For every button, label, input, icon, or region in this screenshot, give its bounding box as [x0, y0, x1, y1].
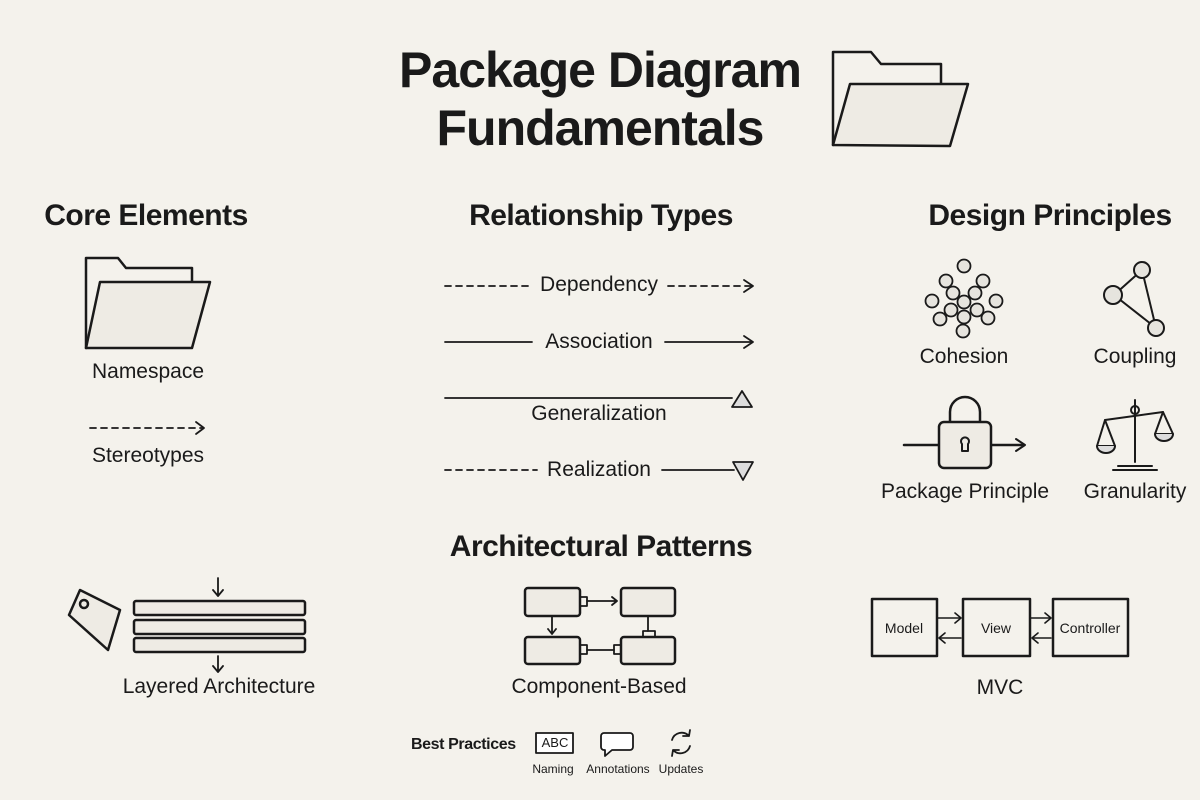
arrow: stereotypes	[90, 422, 204, 434]
label: package principle: Package Principle	[881, 480, 1049, 503]
label: generalization: Generalization	[531, 402, 667, 425]
label: association: Association	[545, 330, 653, 353]
label: annotations: Annotations	[586, 762, 650, 776]
icon: lock	[904, 397, 1025, 468]
heading: core elements: Core Elements	[44, 199, 248, 232]
title	[399, 42, 801, 156]
text: ABC: ABC	[542, 735, 568, 750]
title: Fundamentals	[437, 100, 763, 156]
icon: title folder	[833, 52, 968, 146]
heading: design principles: Design Principles	[928, 199, 1172, 232]
icon: naming	[536, 733, 573, 753]
icon: scale	[1097, 400, 1173, 470]
heading: relationship types: Relationship Types	[469, 199, 733, 232]
label: namespace: Namespace	[92, 360, 204, 383]
icon: cohesion	[926, 260, 1002, 338]
icon: annotations	[601, 733, 633, 756]
label: mvc: MVC	[977, 676, 1023, 699]
label: component-based: Component-Based	[511, 675, 687, 698]
label: cohesion: Cohesion	[920, 345, 1008, 368]
label: coupling: Coupling	[1094, 345, 1176, 368]
title: Package Diagram	[399, 42, 801, 98]
icon: coupling	[1104, 262, 1164, 336]
relationship: association	[445, 336, 753, 348]
relationship: realization	[445, 462, 753, 480]
label: model: Model	[885, 620, 923, 636]
label: stereotypes: Stereotypes	[92, 444, 204, 467]
icon: layered architecture	[134, 578, 305, 672]
icon: mvc	[872, 599, 1128, 656]
icon: tag	[69, 590, 120, 650]
icon: component-based	[525, 588, 675, 664]
label: naming: Naming	[532, 762, 574, 776]
icon: namespace folder	[86, 258, 210, 348]
heading: architectural patterns: Architectural Patterns	[450, 530, 752, 563]
label: layered architecture: Layered Architecture	[123, 675, 315, 698]
label: granularity: Granularity	[1084, 480, 1186, 503]
label: updates: Updates	[659, 762, 703, 776]
label: controller: Controller	[1060, 620, 1120, 636]
relationship: dependency	[445, 280, 753, 292]
label: view: View	[981, 620, 1011, 636]
best practices	[411, 735, 703, 776]
relationship: generalization	[445, 391, 752, 407]
label: best practices: Best Practices	[411, 736, 516, 753]
label: realization: Realization	[547, 458, 651, 481]
label: dependency: Dependency	[540, 273, 658, 296]
icon: updates	[672, 730, 690, 756]
